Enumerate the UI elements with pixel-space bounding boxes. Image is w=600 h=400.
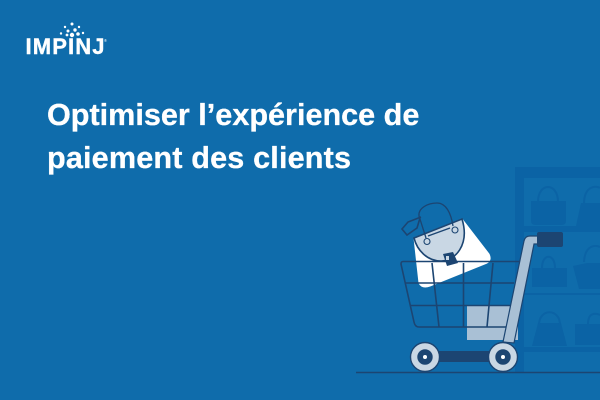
cart basket wire frame bbox=[401, 262, 520, 327]
left wheel bbox=[410, 342, 440, 372]
cart axle bbox=[438, 351, 492, 362]
title: paiement des clients bbox=[47, 141, 351, 175]
right wheel bbox=[488, 342, 518, 372]
handbag with price tag bbox=[402, 203, 490, 287]
cardboard box in cart bbox=[467, 306, 518, 340]
title bbox=[47, 98, 419, 175]
logo: Impinj bbox=[26, 22, 107, 59]
title: Optimiser l’expérience de bbox=[47, 98, 419, 132]
logo: Impinj: IMPINJ bbox=[26, 34, 104, 59]
logo: Impinj: ® bbox=[104, 38, 107, 43]
shelf unit with handbags bbox=[515, 167, 600, 372]
cart handle bbox=[503, 232, 563, 343]
floor line bbox=[356, 372, 600, 374]
